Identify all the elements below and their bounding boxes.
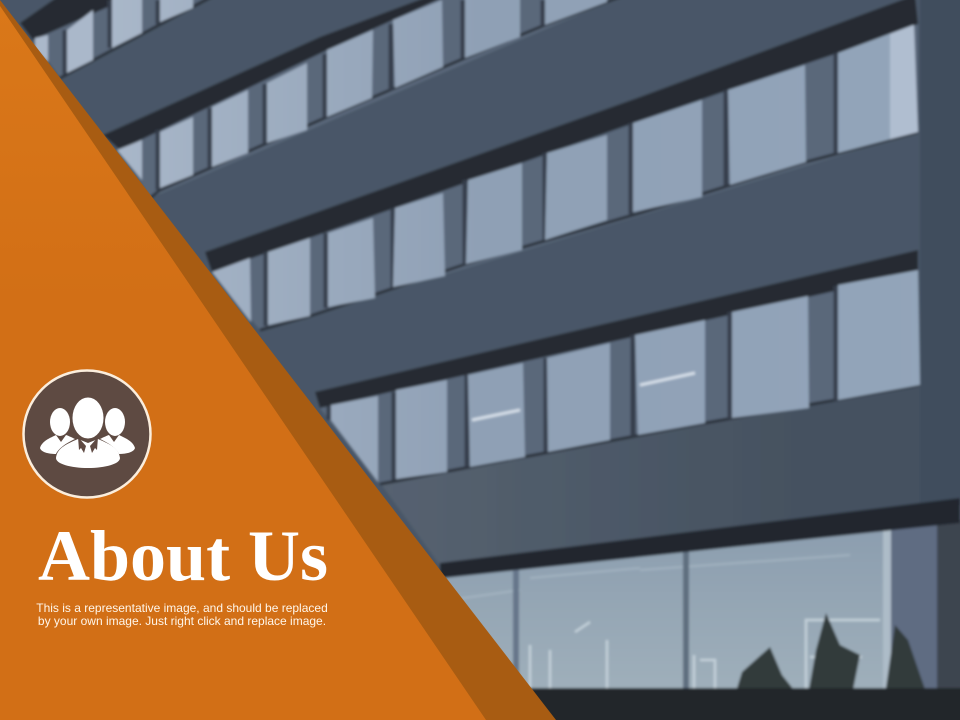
dark orange diagonal band — [0, 0, 556, 720]
description text — [36, 601, 328, 628]
ground floor glass — [445, 530, 890, 700]
right-hand column — [920, 0, 960, 505]
description text: by your own image. Just right click and replace image. — [38, 614, 326, 628]
ground floor beam — [440, 498, 960, 578]
icon: centre person — [56, 398, 120, 468]
top row windows — [35, 0, 607, 188]
lower spandrel panel — [320, 388, 920, 565]
ground floor faint reflections — [450, 555, 850, 600]
icon: left person — [40, 408, 75, 454]
reflections — [530, 620, 880, 690]
dark ground — [445, 688, 960, 720]
window reflections — [472, 373, 695, 420]
icon: right person — [100, 408, 135, 454]
dark strips above windows — [20, 0, 918, 408]
icon: three business people in circle — [24, 370, 150, 498]
title: About Us — [38, 516, 328, 596]
description text: This is a representative image, and should be replaced — [36, 601, 328, 615]
middle row windows — [212, 25, 918, 325]
trees — [735, 613, 927, 695]
ground floor mullions and column — [513, 520, 960, 720]
dark sill lines — [60, 0, 920, 484]
lower row windows — [331, 270, 920, 482]
window row backings — [33, 0, 920, 484]
mullion shadows — [65, 0, 836, 480]
orange triangle panel — [0, 6, 486, 720]
